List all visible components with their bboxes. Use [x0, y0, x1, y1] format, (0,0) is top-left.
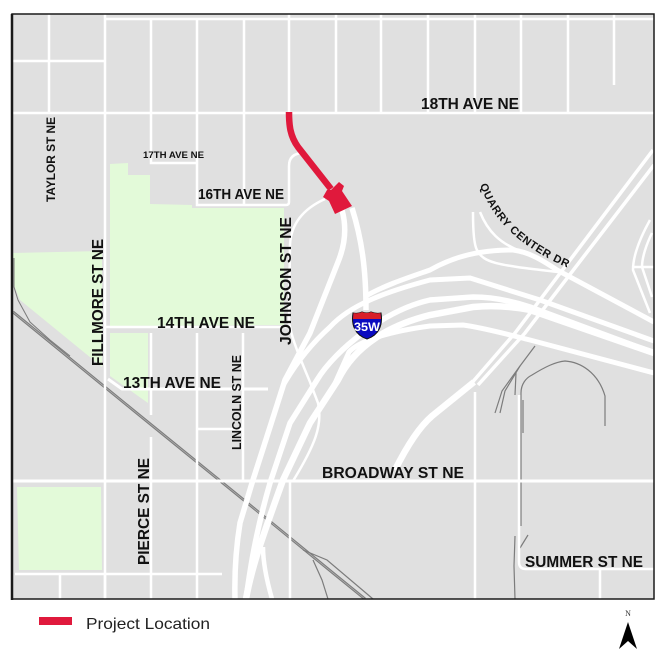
legend label: Project Location: [86, 616, 210, 633]
north arrow: [619, 609, 637, 649]
interstate 35W shield: 35W: [354, 320, 381, 334]
street labels: [46, 98, 642, 567]
legend: project location swatch: [39, 617, 72, 625]
street labels: 13TH AVE NE: [123, 375, 221, 392]
street labels: 18TH AVE NE: [421, 96, 519, 113]
street labels: PIERCE ST NE: [136, 458, 153, 565]
street labels: QUARRY CENTER DR: [480, 184, 570, 268]
north arrow: N: [625, 609, 631, 618]
interstate 35W shield: [353, 312, 381, 339]
street labels: LINCOLN ST NE: [230, 355, 244, 450]
project location: red line: [289, 112, 352, 214]
street labels: BROADWAY ST NE: [322, 465, 464, 482]
highways: [235, 150, 654, 599]
street labels: 14TH AVE NE: [157, 315, 255, 332]
street labels: SUMMER ST NE: [525, 554, 643, 571]
street labels: FILLMORE ST NE: [90, 239, 107, 366]
street labels: 17TH AVE NE: [143, 150, 204, 161]
street labels: 16TH AVE NE: [198, 187, 284, 203]
railroads: [13, 258, 605, 599]
parks: [13, 163, 284, 570]
street labels: JOHNSON ST NE: [278, 217, 295, 345]
street labels: TAYLOR ST NE: [46, 117, 58, 202]
